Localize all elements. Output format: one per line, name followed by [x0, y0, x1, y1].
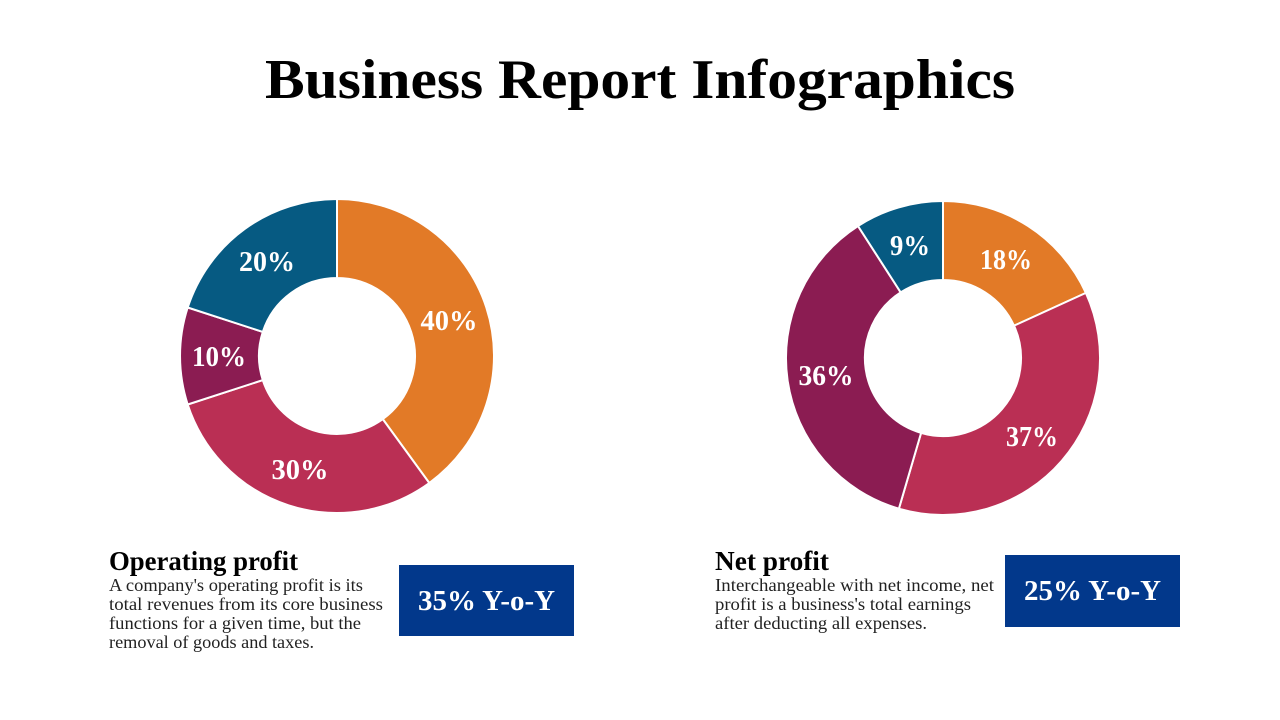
labels: net profit percentages: 36%	[798, 360, 854, 392]
title: Business Report Infographics	[265, 49, 1015, 111]
slice: 40% orange	[337, 199, 494, 483]
text block: operating profit	[109, 546, 383, 652]
slice: 10% purple	[180, 308, 263, 404]
description: operating profit	[109, 575, 383, 652]
labels: net profit percentages	[798, 231, 1058, 453]
labels: operating profit percentages: 30%	[272, 454, 328, 486]
chart: net profit donut	[786, 201, 1100, 515]
slice: 37% red	[899, 293, 1100, 515]
description: operating profit: functions for a given time, but the	[109, 613, 361, 633]
heading: operating profit: Operating profit	[109, 546, 298, 576]
labels: operating profit percentages: 20%	[239, 246, 295, 278]
chart: operating profit donut	[180, 199, 494, 513]
description: operating profit: removal of goods and taxes.	[109, 632, 314, 652]
callout: 35% Y-o-Y	[399, 565, 574, 636]
slice: 30% red	[188, 380, 429, 513]
slice: 36% purple	[786, 226, 921, 509]
description: net profit: profit is a business's total earnings	[715, 594, 971, 614]
heading: net profit: Net profit	[715, 546, 829, 576]
callout: 25% Y-o-Y: 25% Y-o-Y	[1024, 576, 1161, 607]
slice: 20% blue	[188, 199, 337, 332]
description: operating profit: A company's operating profit is its	[109, 575, 363, 595]
slice: 18% orange	[943, 201, 1086, 326]
slice: 9% blue	[858, 201, 943, 292]
labels: net profit percentages: 18%	[980, 245, 1032, 276]
labels: operating profit percentages: 10%	[192, 341, 246, 373]
labels: net profit percentages: 9%	[890, 231, 930, 262]
description: operating profit: total revenues from its core business	[109, 594, 383, 614]
description: net profit: Interchangeable with net income, net	[715, 575, 994, 595]
labels: operating profit percentages: 40%	[420, 305, 478, 337]
description: net profit: after deducting all expenses.	[715, 613, 927, 633]
labels: operating profit percentages	[192, 246, 478, 486]
text block: net profit	[715, 546, 994, 633]
callout: 25% Y-o-Y	[1005, 555, 1180, 627]
description: net profit	[715, 575, 994, 633]
callout: 35% Y-o-Y: 35% Y-o-Y	[418, 586, 555, 617]
labels: net profit percentages: 37%	[1006, 422, 1058, 453]
